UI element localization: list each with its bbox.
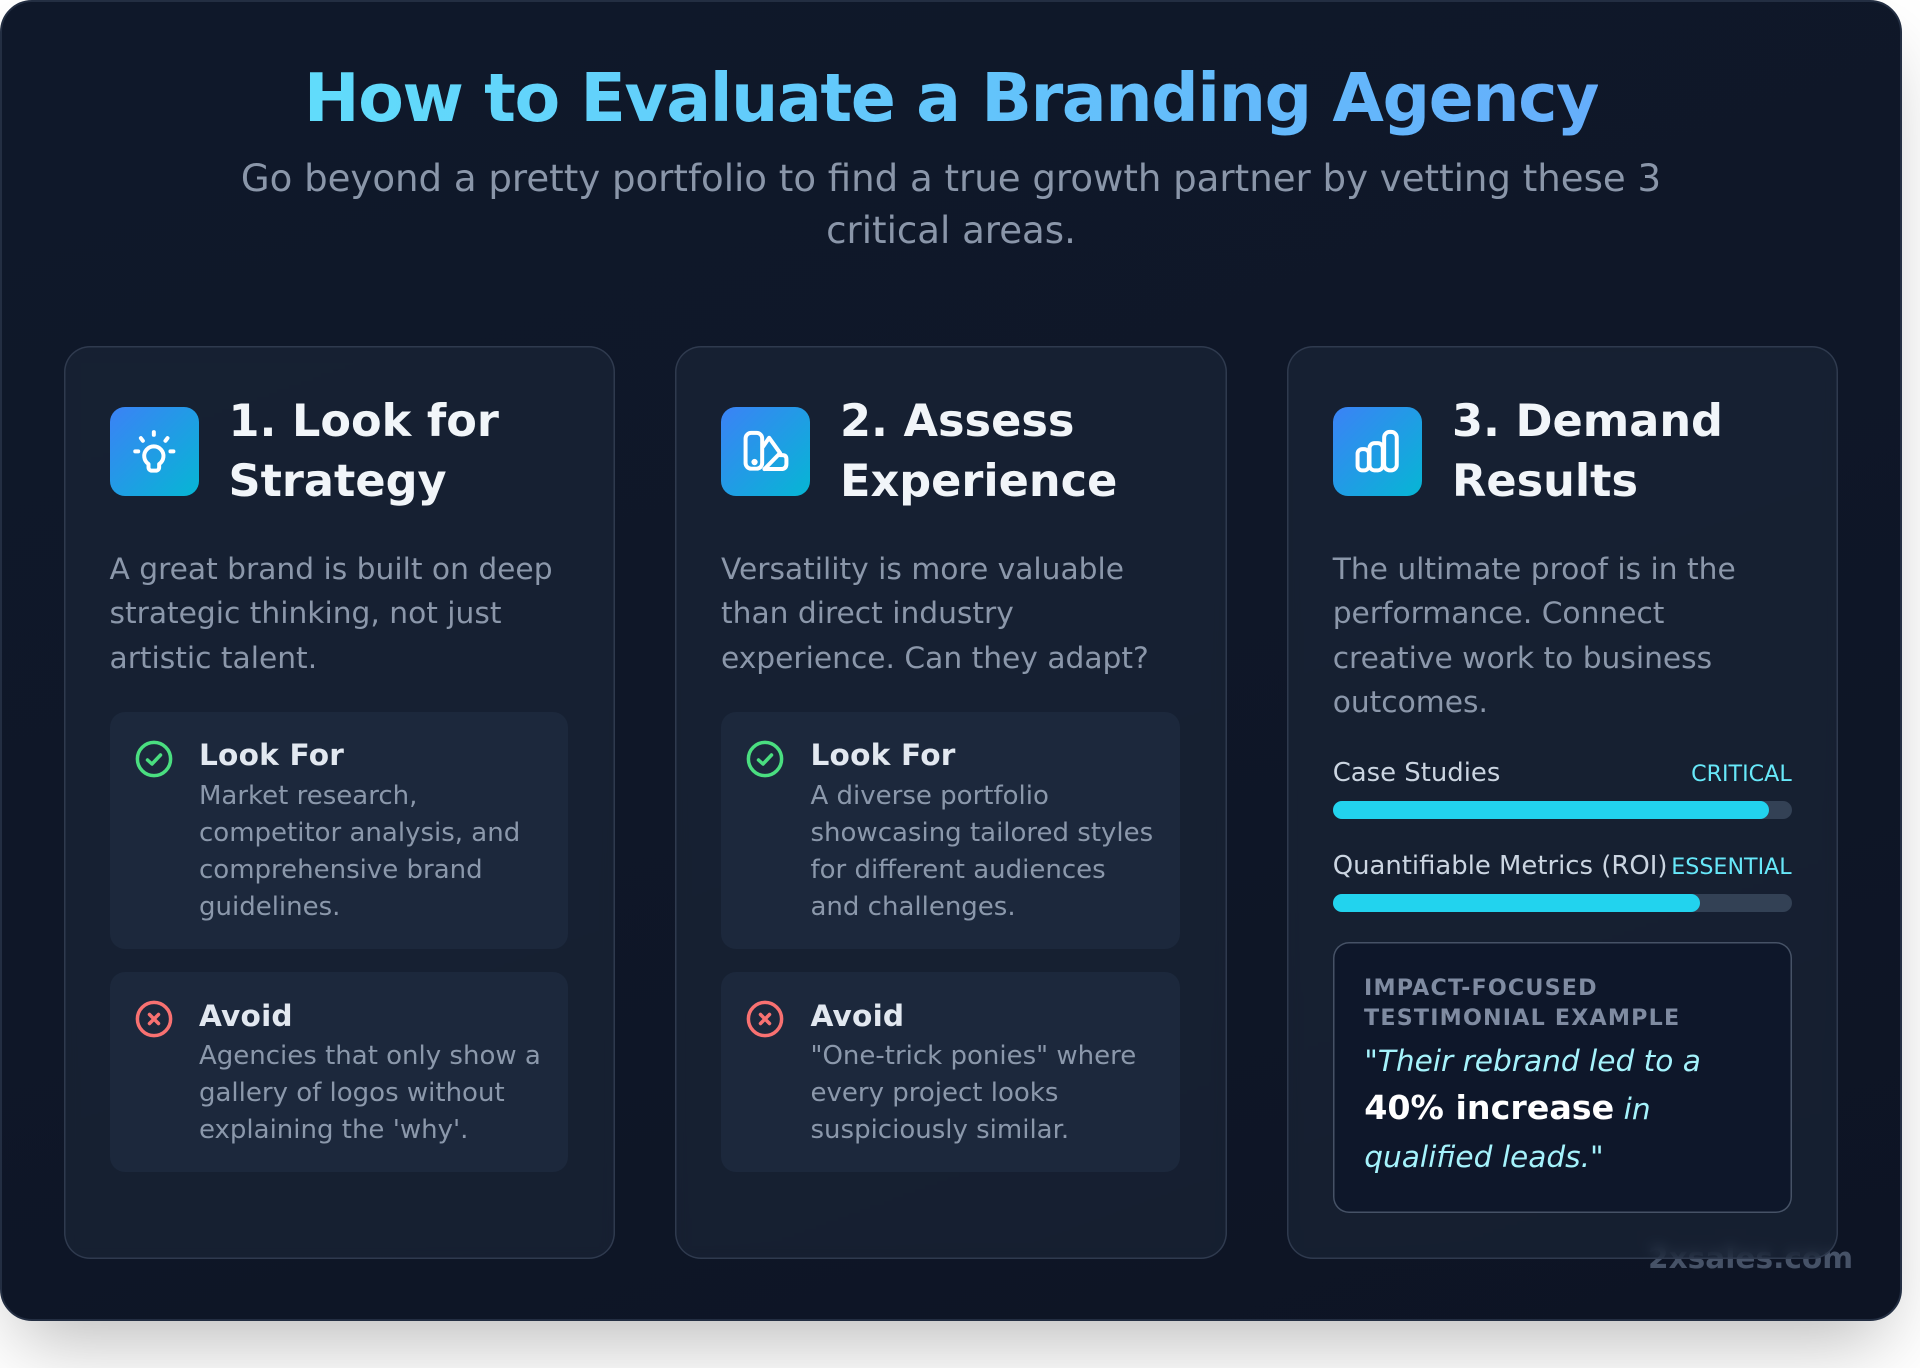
description: outcomes.: [1333, 685, 1488, 720]
subtitle: [241, 157, 1661, 252]
description: A great brand is built on deep: [110, 552, 553, 587]
testimonial label: IMPACT-FOCUSED: [1364, 975, 1598, 1001]
heading: [840, 395, 1117, 507]
heading: Strategy: [228, 455, 447, 507]
detail text: showcasing tailored styles: [810, 818, 1153, 848]
description: creative work to business: [1333, 641, 1712, 676]
icon: check circle: [136, 740, 172, 778]
metric rating: ESSENTIAL: [1671, 854, 1792, 880]
detail text: Market research,: [199, 780, 417, 810]
heading: 3. Demand: [1452, 395, 1723, 447]
heading: [1452, 395, 1723, 507]
label: Avoid: [810, 998, 904, 1032]
description: [110, 552, 553, 676]
testimonial quote: 40% increase in: [1364, 1088, 1651, 1127]
label: Look For: [810, 738, 956, 772]
panel: card 1 strategy: [64, 346, 615, 1259]
heading: 1. Look for: [228, 395, 499, 447]
metric label: Quantifiable Metrics (ROI): [1333, 851, 1667, 881]
detail text: explaining the 'why'.: [199, 1115, 468, 1145]
detail text: and challenges.: [810, 892, 1016, 922]
icon: x circle: [136, 1000, 172, 1038]
callout: avoid: [721, 972, 1180, 1172]
testimonial label: [1364, 975, 1680, 1031]
progress bar 80%: [1333, 894, 1792, 912]
progress bar 95%: [1333, 801, 1792, 819]
subtitle: critical areas.: [826, 209, 1076, 252]
watermark: 2xsales.com: [1648, 1241, 1853, 1275]
subtitle: Go beyond a pretty portfolio to find a true growth partner by vetting these 3: [241, 157, 1661, 200]
metric rating: CRITICAL: [1691, 761, 1792, 787]
title: How to Evaluate a Branding Agency: [304, 59, 1598, 137]
description: than direct industry: [721, 596, 1014, 631]
description: artistic talent.: [110, 641, 317, 676]
testimonial label: TESTIMONIAL EXAMPLE: [1364, 1005, 1680, 1031]
detail text: Agencies that only show a: [199, 1041, 541, 1071]
label: Look For: [199, 738, 344, 772]
icon: light bulb: [110, 406, 198, 496]
description: experience. Can they adapt?: [721, 641, 1149, 676]
detail text: for different audiences: [810, 854, 1106, 884]
detail text: gallery of logos without: [199, 1078, 505, 1108]
detail text: competitor analysis, and: [199, 818, 520, 848]
description: [721, 552, 1149, 676]
detail text: [199, 780, 520, 922]
panel: card 2 experience: [675, 346, 1227, 1259]
callout: look for: [721, 712, 1180, 948]
detail text: [810, 1041, 1136, 1145]
detail text: [199, 1041, 541, 1145]
testimonial quote: qualified leads.": [1364, 1140, 1604, 1174]
icon: bar chart: [1333, 406, 1422, 496]
description: The ultimate proof is in the: [1333, 552, 1736, 587]
description: Versatility is more valuable: [721, 552, 1124, 587]
icon: x circle: [746, 1000, 784, 1038]
description: performance. Connect: [1333, 596, 1664, 631]
heading: 2. Assess: [840, 395, 1074, 447]
detail text: A diverse portfolio: [810, 780, 1049, 810]
callout: look for: [110, 712, 568, 948]
detail text: suspiciously similar.: [810, 1115, 1069, 1145]
detail text: guidelines.: [199, 892, 340, 922]
bar chart: case studies: [1333, 758, 1792, 819]
testimonial quote: [1364, 1044, 1701, 1174]
detail text: [810, 780, 1153, 922]
heading: Results: [1452, 455, 1638, 507]
heading: [228, 395, 499, 507]
icon: check circle: [746, 740, 784, 778]
callout: testimonial example: [1333, 942, 1792, 1213]
label: Avoid: [199, 998, 293, 1032]
description: strategic thinking, not just: [110, 596, 501, 631]
testimonial quote: "Their rebrand led to a: [1364, 1044, 1701, 1078]
detail text: every project looks: [810, 1078, 1058, 1108]
callout: avoid: [110, 972, 568, 1172]
detail text: "One-trick ponies" where: [810, 1041, 1136, 1071]
detail text: comprehensive brand: [199, 854, 483, 884]
description: [1332, 552, 1736, 720]
metric label: Case Studies: [1333, 758, 1500, 788]
heading: Experience: [840, 455, 1117, 507]
panel: card 3 results: [1287, 346, 1838, 1259]
bar chart: quantifiable metrics: [1333, 851, 1792, 912]
icon: color swatch: [721, 406, 810, 496]
